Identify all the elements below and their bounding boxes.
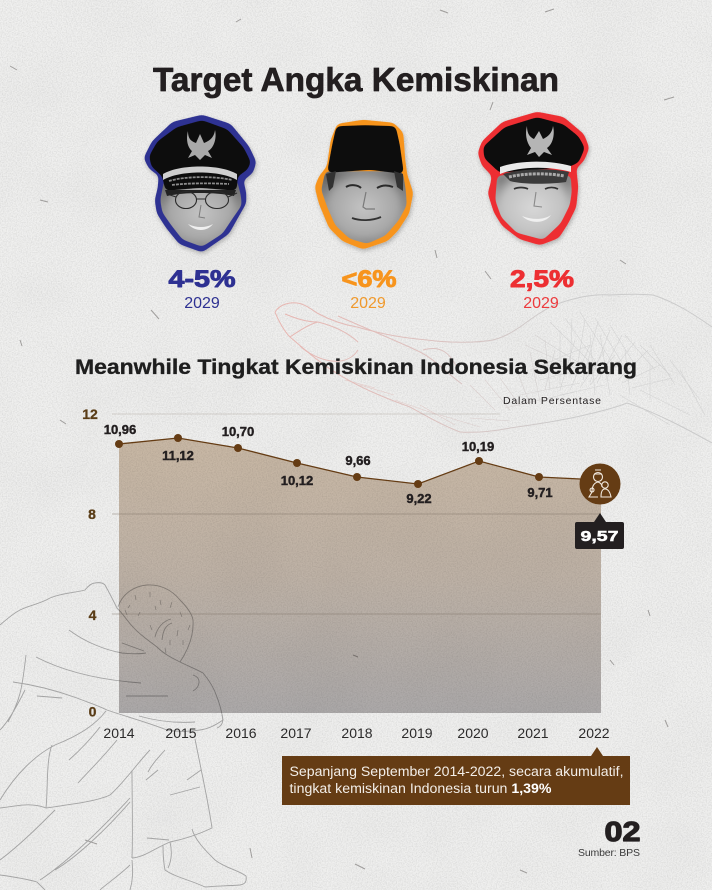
officer cap xyxy=(150,121,250,190)
y axis: 8 xyxy=(88,506,96,522)
officer cap xyxy=(484,118,584,172)
y axis: 0 xyxy=(89,704,97,720)
data labels: 10,96 xyxy=(104,422,136,437)
target 1: 4-5% xyxy=(168,266,236,293)
garuda emblem xyxy=(187,130,216,160)
title: Target Angka Kemiskinan xyxy=(153,61,559,98)
callout: cumulative decline xyxy=(282,747,630,805)
x axis years: 2016 xyxy=(225,725,257,741)
chart heading: Meanwhile Tingkat Kemiskinan Indonesia Sekarang xyxy=(75,356,637,379)
latest value tag: 9,57 xyxy=(580,528,618,545)
callout: cumulative decline: Sepanjang September 2014-2022, secara akumulatif, xyxy=(290,764,624,779)
target 1 xyxy=(168,266,236,312)
y axis: 12 xyxy=(82,406,98,422)
illustration: open hand sketch xyxy=(275,294,712,443)
target 3: 2,5% xyxy=(510,266,574,293)
illustration: sitting figure sketch xyxy=(0,583,246,890)
page number: 02 xyxy=(604,816,640,847)
data labels: 9,66 xyxy=(345,453,371,468)
x axis years: 2017 xyxy=(280,725,312,741)
x axis years xyxy=(103,725,610,741)
candidate 1: portrait with navy outline xyxy=(145,116,255,251)
target 2 xyxy=(342,266,396,312)
x axis years: 2020 xyxy=(457,725,489,741)
data labels: 10,19 xyxy=(462,439,494,454)
target 3: 2029 xyxy=(523,295,559,312)
x axis years: 2014 xyxy=(103,725,135,741)
data labels: 9,22 xyxy=(406,491,432,506)
unit note: Dalam Persentase xyxy=(503,395,601,407)
glasses and mouth xyxy=(170,192,237,208)
source: Sumber: BPS xyxy=(578,847,640,859)
target 3 xyxy=(510,266,574,312)
garuda emblem xyxy=(526,126,554,157)
y axis: 4 xyxy=(89,607,97,623)
latest value tag xyxy=(575,513,624,549)
x axis years: 2015 xyxy=(165,725,197,741)
candidate 2: portrait with orange outline xyxy=(316,121,412,248)
face xyxy=(161,180,241,246)
line chart xyxy=(82,406,624,741)
target 1: 2029 xyxy=(184,295,220,312)
target 2: <6% xyxy=(342,266,396,293)
callout: cumulative decline: tingkat kemiskinan Indonesia turun 1,39% xyxy=(290,781,552,796)
data labels: 10,12 xyxy=(281,473,313,488)
data labels xyxy=(104,422,553,506)
x axis years: 2019 xyxy=(401,725,433,741)
data labels: 11,12 xyxy=(162,448,194,463)
x axis years: 2021 xyxy=(517,725,549,741)
y axis xyxy=(82,406,98,720)
black peci cap xyxy=(328,126,403,173)
x axis years: 2022 xyxy=(578,725,610,741)
data labels: 9,71 xyxy=(527,485,553,500)
data line xyxy=(115,434,601,488)
candidate 3: portrait with red outline xyxy=(479,113,588,244)
target 2: 2029 xyxy=(350,295,386,312)
x axis years: 2018 xyxy=(341,725,373,741)
area under line xyxy=(119,438,601,713)
icon: poor family in circle xyxy=(580,464,620,504)
data labels: 10,70 xyxy=(222,424,254,439)
